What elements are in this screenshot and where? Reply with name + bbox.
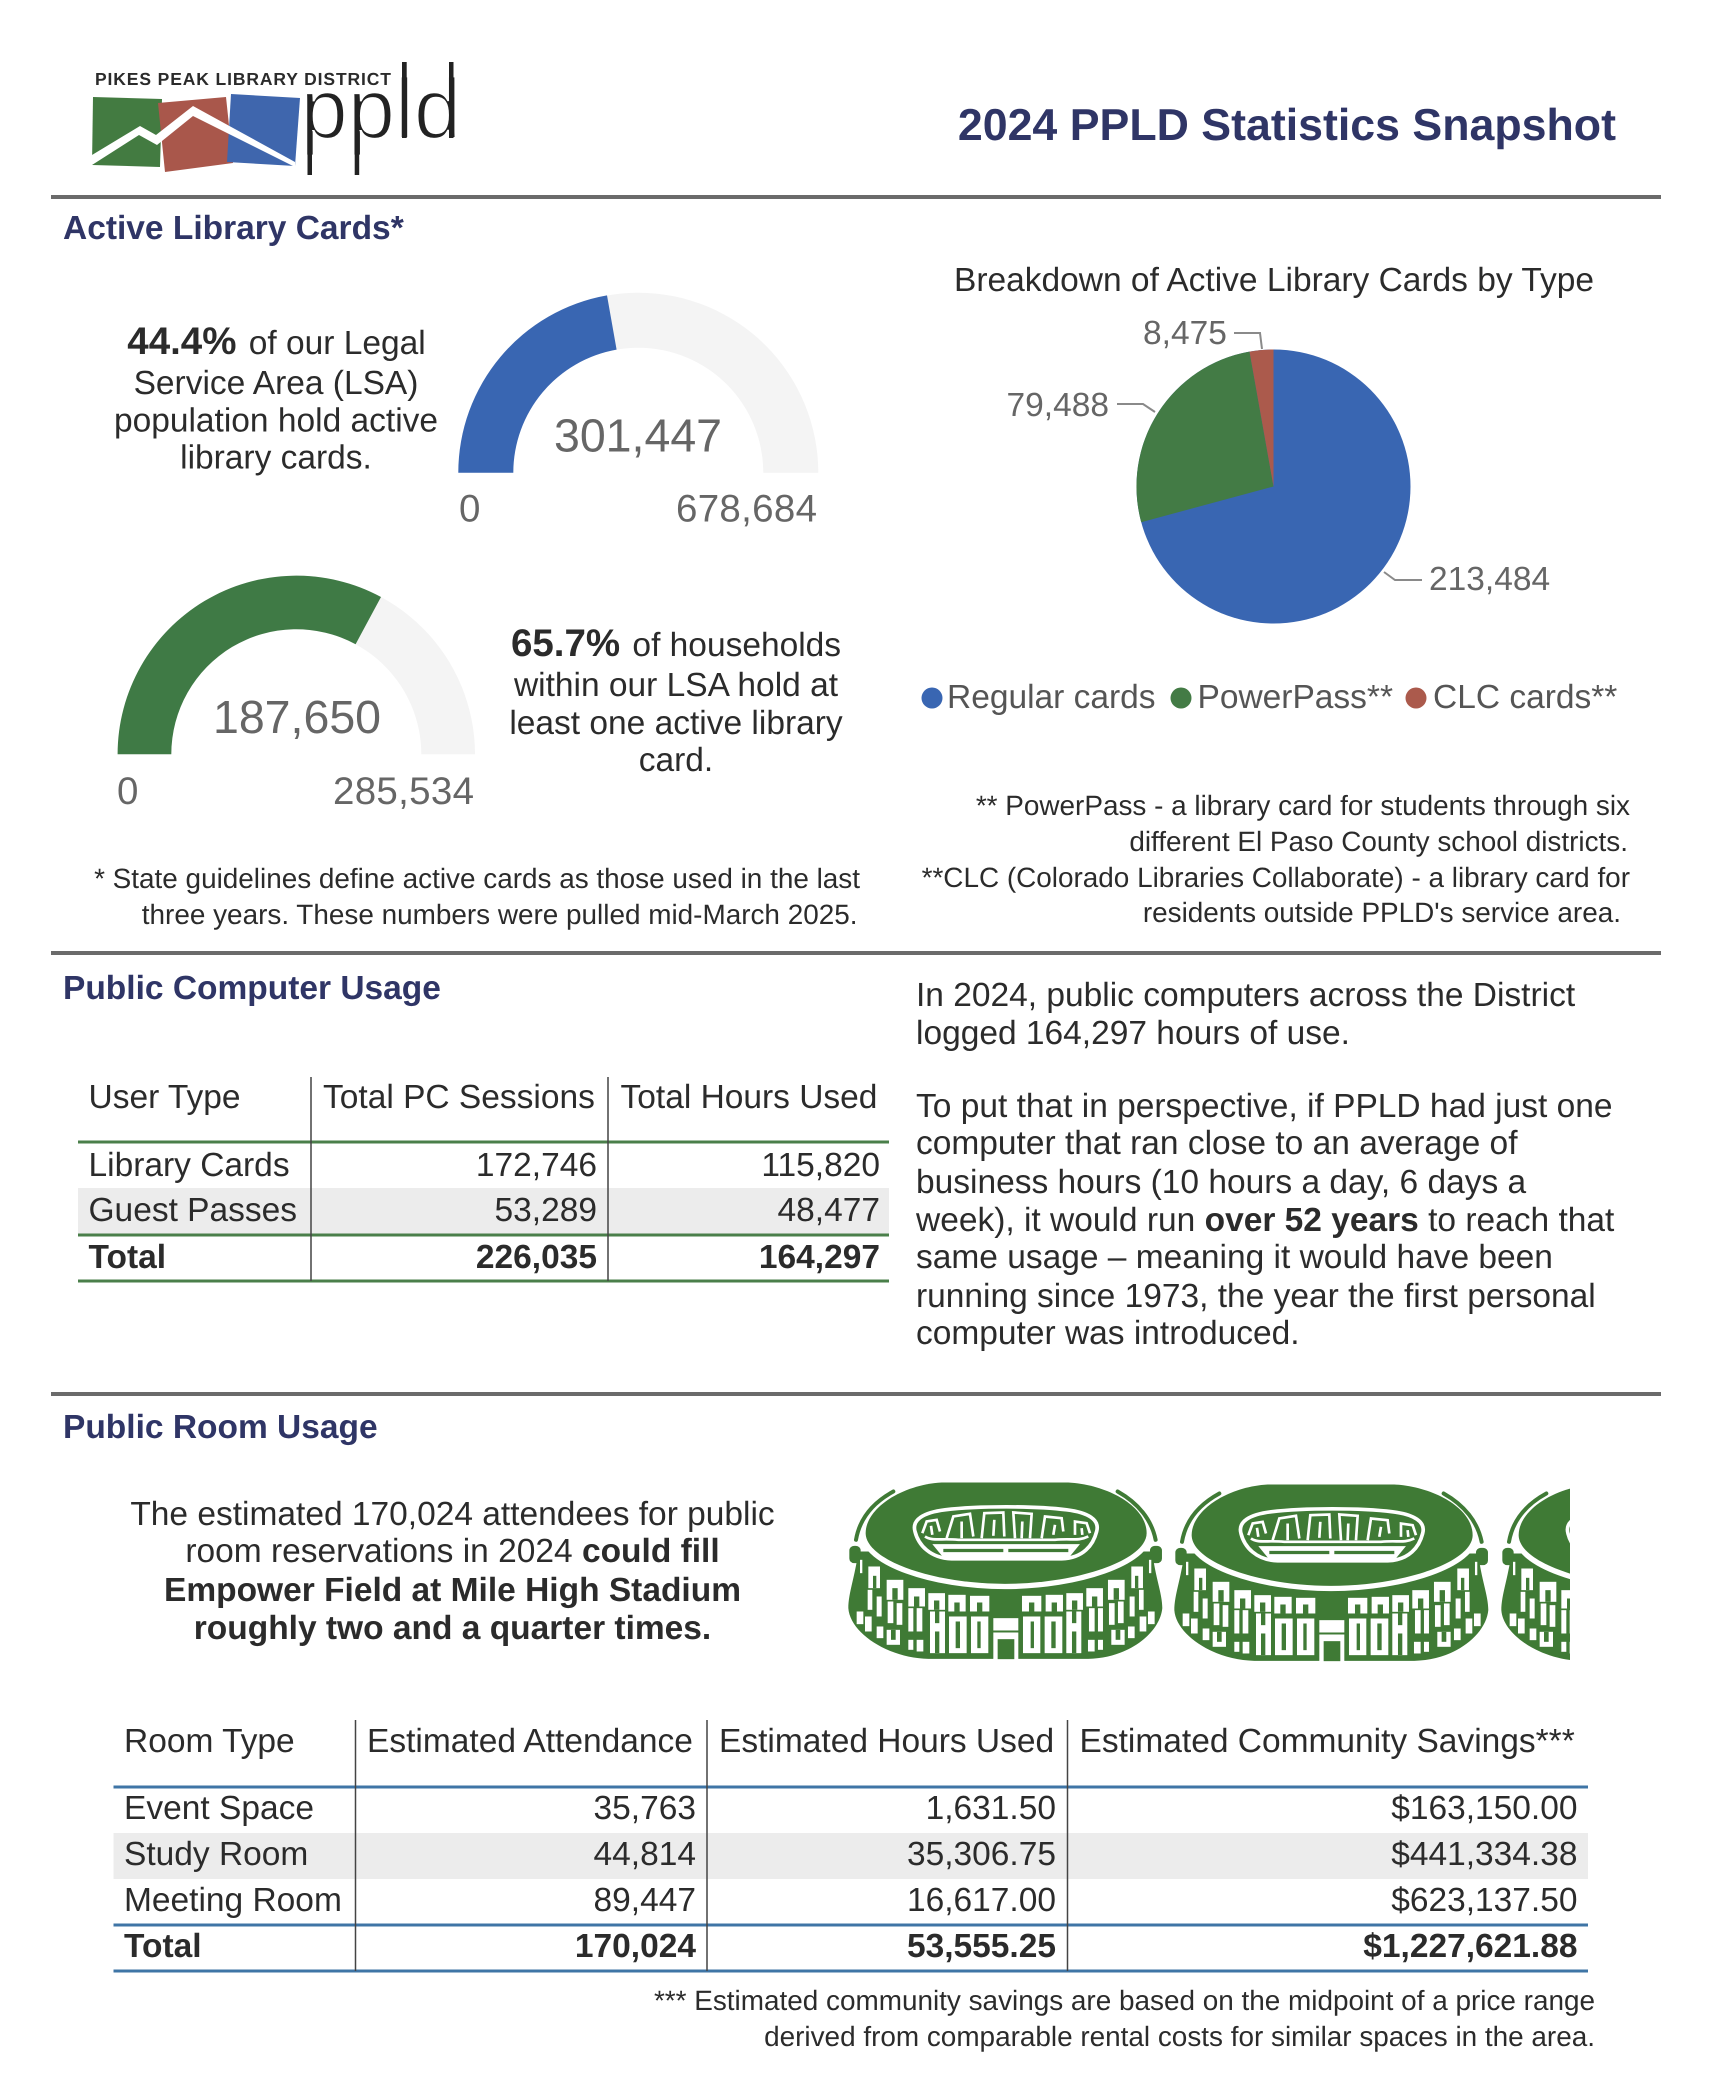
- panel: public computer usage: [63, 970, 1615, 1352]
- logo squares and mountain line: [92, 94, 300, 172]
- table: room usage: Room Type: [124, 1723, 295, 1760]
- logo: Pikes Peak Library District: [92, 62, 461, 175]
- table: room usage: Estimated Community Savings***: [1080, 1723, 1575, 1760]
- footnote: card definitions: residents outside PPLD's service area.: [1143, 897, 1621, 928]
- pie legend: [922, 679, 1617, 716]
- table: room usage: Estimated Hours Used: [719, 1723, 1054, 1760]
- text: perspective: same usage – meaning it would have been: [916, 1239, 1553, 1276]
- footnote: state guidelines: * State guidelines define active cards as those used in the last: [94, 863, 860, 894]
- table: room usage: $163,150.00: [1391, 1790, 1578, 1827]
- text: hours of use: In 2024, public computers across the District: [916, 977, 1576, 1014]
- footnote: community savings: [654, 1985, 1595, 2052]
- footnote: community savings: *** Estimated community savings are based on the midpoint of a price range: [654, 1985, 1595, 2016]
- table: room usage: Event Space: [124, 1790, 314, 1827]
- table: room usage: 44,814: [594, 1836, 696, 1873]
- table: computer usage: Total PC Sessions: [323, 1079, 595, 1116]
- gauge: LSA population: 301,447: [554, 410, 722, 462]
- gauge: LSA population: [458, 293, 818, 530]
- logo caption: PIKES PEAK LIBRARY DISTRICT: [95, 69, 391, 89]
- table: room usage: 16,617.00: [907, 1882, 1056, 1919]
- pie chart: card types: 8,475: [1143, 315, 1227, 352]
- text: 65.7% of households: card.: [639, 742, 713, 779]
- text: perspective: week), it would run over 52 years to reach that: [915, 1202, 1615, 1239]
- text: 44.4% of LSA: library cards.: [180, 440, 372, 476]
- text: 65.7% of households: 65.7% of households: [511, 622, 841, 665]
- footnote: card definitions: different El Paso County school districts.: [1129, 826, 1628, 857]
- gauge: households: 187,650: [213, 691, 381, 743]
- text: 44.4% of LSA: population hold active: [114, 402, 438, 440]
- table: room usage: Study Room: [124, 1836, 308, 1873]
- text: 65.7% of households: within our LSA hold at: [513, 667, 839, 704]
- text: perspective: business hours (10 hours a day, 6 days a: [916, 1164, 1527, 1201]
- footnote: card definitions: [922, 790, 1630, 928]
- text: stadium comparison: Empower Field at Mile High Stadium: [164, 1572, 741, 1609]
- heading: public computer usage: Public Computer Usage: [63, 970, 441, 1007]
- footnote: card definitions: ** PowerPass - a library card for students through six: [976, 790, 1630, 821]
- pie chart: card types: 79,488: [1007, 387, 1109, 424]
- text: 65.7% of households: least one active library: [509, 705, 843, 742]
- text: stadium comparison: roughly two and a quarter times.: [194, 1610, 711, 1647]
- table: computer usage: 164,297: [759, 1239, 880, 1276]
- table: room usage: 35,763: [594, 1790, 696, 1827]
- header: [92, 62, 1616, 175]
- logo wordmark: ppld: [300, 62, 461, 157]
- table: room usage: Total: [124, 1928, 202, 1965]
- panel: public room usage: [63, 1409, 1714, 2052]
- pie legend: Regular cards: [947, 679, 1156, 716]
- table: room usage: 53,555.25: [907, 1928, 1056, 1965]
- table: computer usage: 53,289: [495, 1192, 597, 1229]
- footnote: card definitions: **CLC (Colorado Libraries Collaborate) - a library card for: [922, 862, 1630, 893]
- footnote: community savings: derived from comparable rental costs for similar spaces in the area.: [764, 2021, 1595, 2052]
- pie chart: card types: [1007, 315, 1550, 624]
- heading: active library cards: Active Library Cards*: [63, 210, 404, 247]
- panel: active library cards: [63, 210, 1630, 930]
- text: perspective: running since 1973, the year the first personal: [916, 1278, 1596, 1315]
- footnote: state guidelines: [94, 863, 860, 930]
- table: room usage: Estimated Attendance: [367, 1723, 693, 1760]
- table: computer usage: 115,820: [761, 1147, 880, 1184]
- text: stadium comparison: [130, 1496, 775, 1647]
- table: room usage: $1,227,621.88: [1363, 1928, 1578, 1965]
- table: computer usage: User Type: [88, 1079, 241, 1116]
- text: 65.7% of households: [509, 622, 843, 779]
- table: room usage: $623,137.50: [1391, 1882, 1578, 1919]
- text: hours of use: [916, 977, 1576, 1052]
- text: perspective: computer that ran close to an average of: [916, 1125, 1518, 1162]
- table: room usage: 35,306.75: [907, 1836, 1056, 1873]
- gauge: households: [117, 576, 475, 813]
- text: 44.4% of LSA: Service Area (LSA): [134, 365, 418, 402]
- table: room usage: 89,447: [594, 1882, 696, 1919]
- table: room usage: $441,334.38: [1391, 1836, 1578, 1873]
- text: hours of use: logged 164,297 hours of use.: [916, 1015, 1350, 1052]
- table: room usage: Meeting Room: [124, 1882, 342, 1919]
- table: computer usage: Total Hours Used: [620, 1079, 877, 1116]
- table: computer usage: 172,746: [476, 1147, 597, 1184]
- table: computer usage: 48,477: [778, 1192, 880, 1229]
- heading: public room usage: Public Room Usage: [63, 1409, 378, 1446]
- gauge: LSA population: 0: [459, 488, 480, 530]
- table: room usage: 1,631.50: [926, 1790, 1056, 1827]
- gauge: households: 285,534: [333, 770, 474, 813]
- table: computer usage: Total: [88, 1239, 166, 1276]
- table: computer usage: [78, 1077, 889, 1281]
- table: computer usage: 226,035: [476, 1239, 597, 1276]
- table: computer usage: Guest Passes: [88, 1192, 297, 1229]
- icons: stadiums: [848, 1482, 1570, 1662]
- pie chart: card types: 213,484: [1429, 561, 1550, 598]
- pie legend: CLC cards**: [1433, 679, 1617, 716]
- table: room usage: [114, 1720, 1588, 1971]
- pie legend: PowerPass**: [1198, 679, 1393, 716]
- text: perspective: [915, 1088, 1615, 1352]
- text: perspective: To put that in perspective, if PPLD had just one: [916, 1088, 1612, 1125]
- text: 44.4% of LSA: 44.4% of our Legal: [127, 320, 426, 363]
- pie chart title: Breakdown of Active Library Cards by Type: [954, 262, 1594, 299]
- text: stadium comparison: The estimated 170,024 attendees for public: [130, 1496, 775, 1533]
- text: stadium comparison: room reservations in 2024 could fill: [185, 1533, 720, 1570]
- table: room usage: 170,024: [575, 1928, 696, 1965]
- text: perspective: computer was introduced.: [916, 1315, 1300, 1352]
- text: 44.4% of LSA: [114, 320, 438, 476]
- footnote: state guidelines: three years. These numbers were pulled mid-March 2025.: [142, 899, 858, 930]
- gauge: LSA population: 678,684: [676, 488, 817, 530]
- gauge: households: 0: [117, 770, 138, 813]
- table: computer usage: Library Cards: [88, 1147, 290, 1184]
- title: 2024 PPLD Statistics Snapshot: [958, 101, 1616, 150]
